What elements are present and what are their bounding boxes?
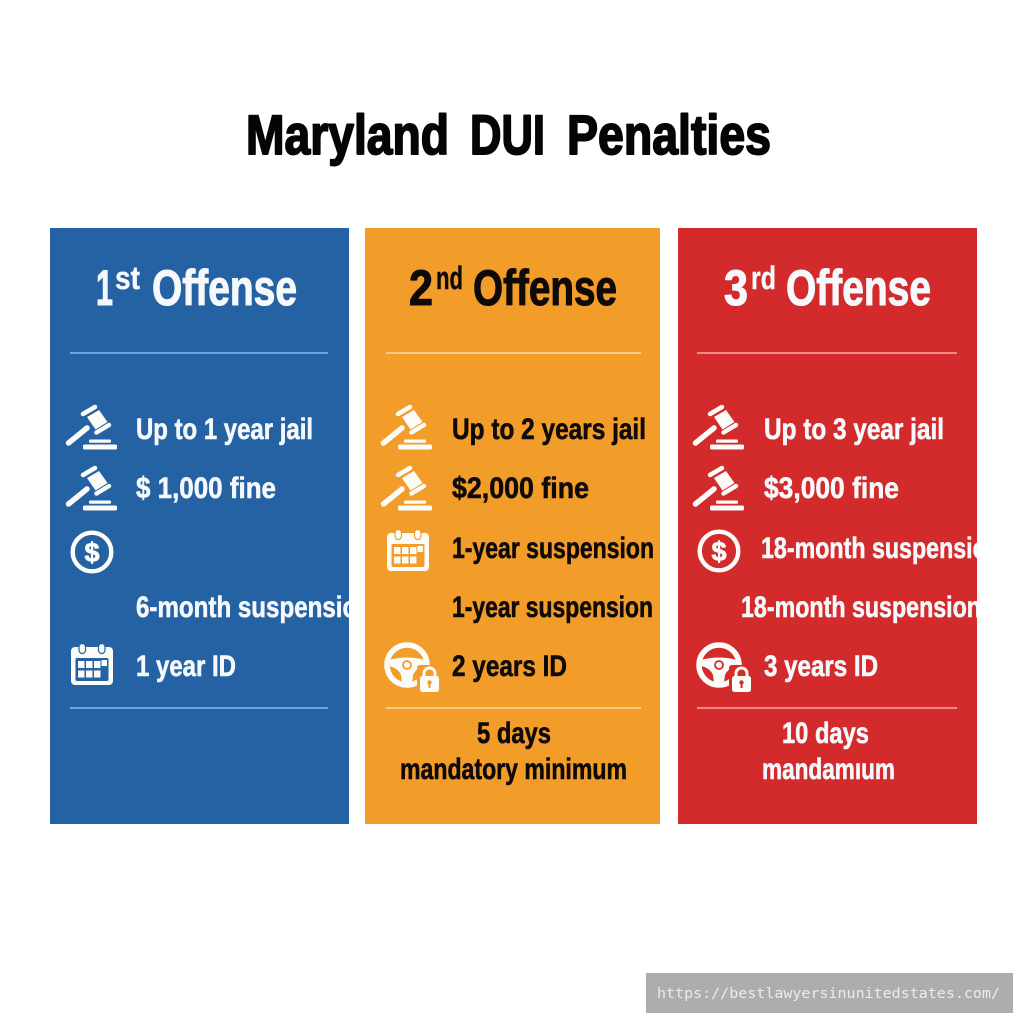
watermark url: https://bestlawyersinunitedstates.com/ [657, 986, 1000, 1002]
title: Penalties [567, 103, 771, 166]
icon: steering wheel with lock [387, 645, 441, 693]
heading: 1st Offense: Offense [152, 260, 297, 316]
text: mandamium: mandamıum [762, 753, 895, 786]
icon: gavel [696, 468, 744, 510]
heading: 1st Offense: st [115, 260, 140, 296]
heading: 2nd Offense: Offense [473, 260, 617, 316]
heading: 3rd Offense: Offense [786, 260, 931, 316]
title: DUI [470, 103, 545, 166]
panel background: red [678, 228, 977, 824]
panel background: blue [50, 228, 349, 824]
panel: 3rd offense [678, 228, 1001, 824]
text: jail: Up to 2 years jail [452, 413, 646, 446]
title [246, 103, 771, 166]
icon: calendar [387, 530, 429, 571]
text: fine: $ 1,000 fine [136, 472, 276, 505]
icon: gavel [68, 407, 117, 450]
text: fine: $3,000 fine [764, 472, 899, 505]
text: fine: $2,000 fine [452, 472, 589, 505]
icon: gavel [68, 468, 117, 510]
text: jail: Up to 1 year jail [136, 413, 313, 446]
panel background: orange [365, 228, 660, 824]
panel: 1st offense [50, 228, 372, 824]
icon: calendar [71, 644, 113, 685]
watermark url [646, 973, 1013, 1013]
heading: 1st Offense [98, 268, 296, 306]
heading: 2nd Offense [410, 265, 616, 306]
heading: 2nd Offense: nd [436, 260, 463, 296]
text: 5 days: 5 days [477, 717, 551, 750]
icon: gavel [384, 468, 432, 510]
heading: 3rd Offense: rd [751, 260, 776, 296]
text: suspension repeated: 1-year suspension [452, 591, 653, 624]
icon: dollar [73, 533, 111, 571]
heading: 1st Offense: 1 [96, 260, 113, 316]
text: ID: 3 years ID [764, 650, 878, 683]
text: suspension: 6-month suspension [136, 591, 372, 624]
heading: 3rd Offense: 3 [724, 260, 748, 316]
text: jail: Up to 3 year jail [764, 413, 944, 446]
text: suspension: 1-year suspension [452, 532, 654, 565]
panel: 2nd offense [365, 228, 660, 824]
icon: gavel [696, 407, 744, 450]
icon: dollar [700, 532, 738, 570]
icon: gavel [384, 407, 432, 450]
title: Maryland [246, 103, 449, 166]
text: ID: 2 years ID [452, 650, 567, 683]
heading: 3rd Offense [724, 265, 930, 306]
text: ID: 1 year ID [136, 650, 236, 683]
text: 10 days: 10 days [782, 717, 869, 750]
heading: 2nd Offense: 2 [409, 260, 433, 316]
icon: steering wheel with lock [699, 645, 753, 693]
text: mandatory minimum: mandatory minimum [400, 753, 627, 786]
